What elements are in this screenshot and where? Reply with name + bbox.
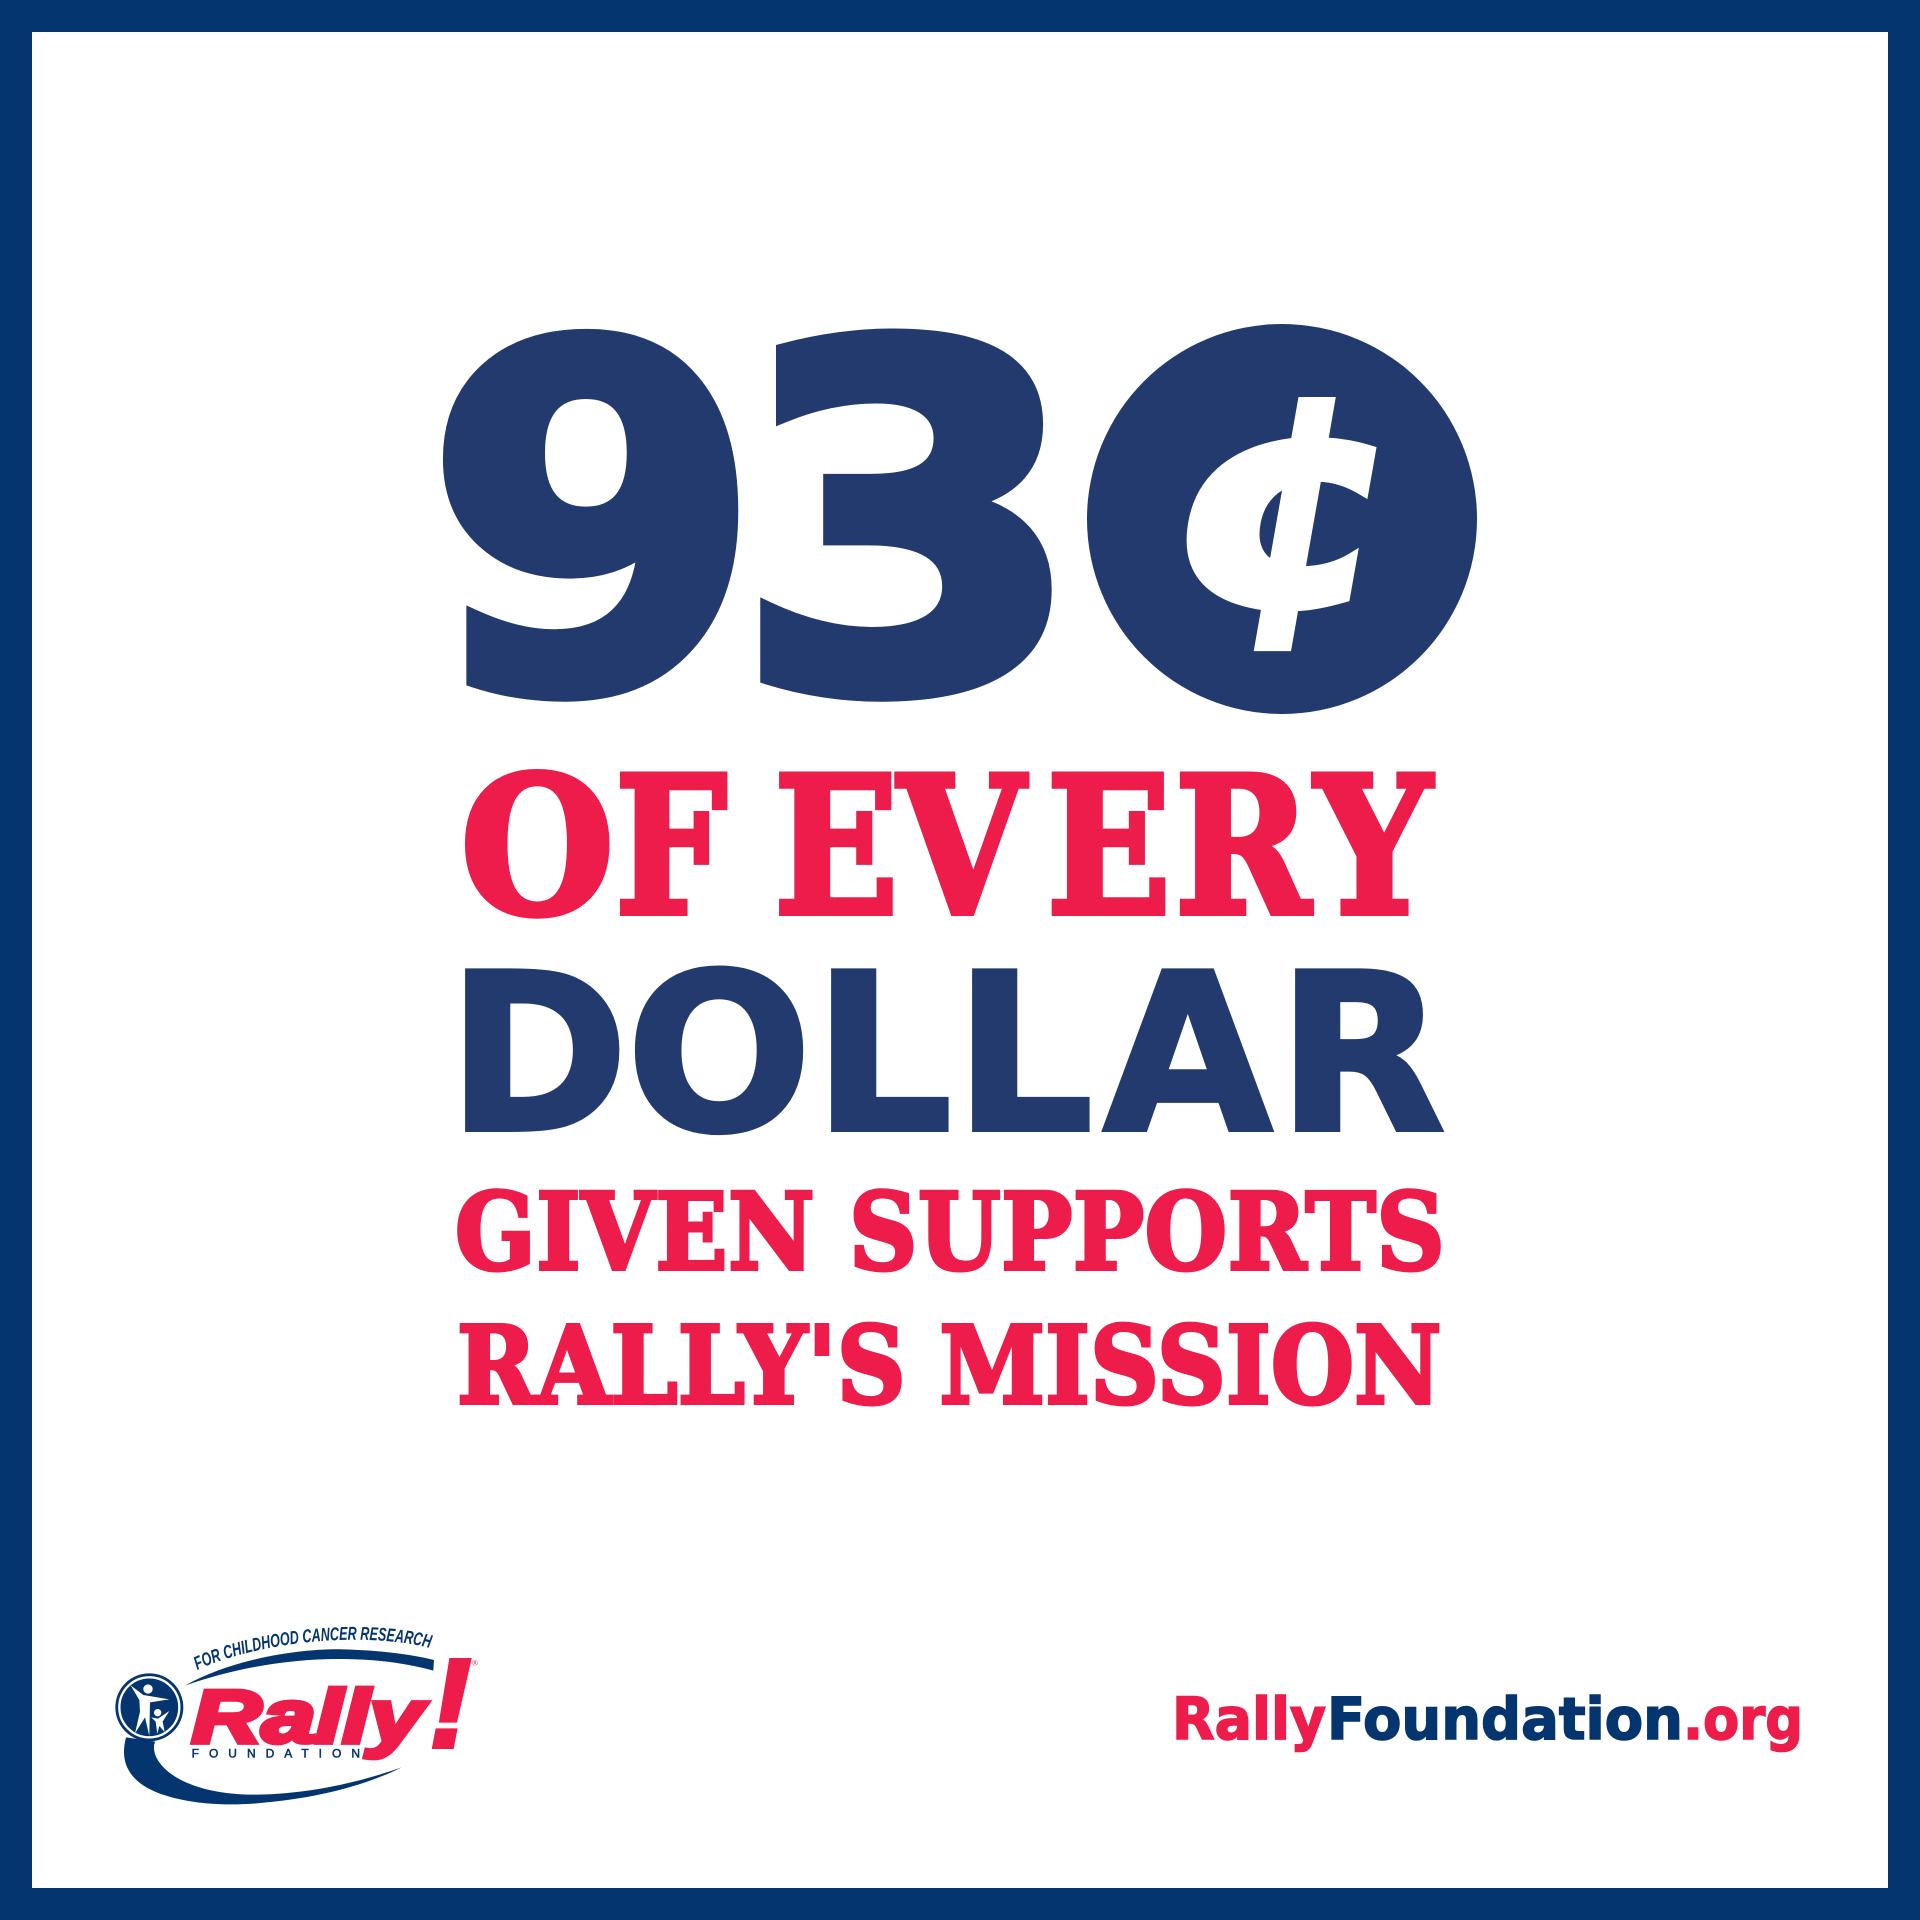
text line: RALLY'S MISSION: RALLY'S MISSION <box>457 1303 1441 1428</box>
website URL: Rally <box>1172 1685 1326 1753</box>
logo emblem: adult and child figures <box>115 1673 183 1741</box>
logo exclamation mark: ! <box>429 1632 471 1774</box>
logo tagline: FOR CHILDHOOD CANCER RESEARCH <box>194 1626 434 1670</box>
text line: OF EVERY: EVERY <box>774 735 1434 958</box>
logo top swoosh <box>185 1649 434 1686</box>
text line: GIVEN SUPPORTS: GIVEN SUPPORTS <box>455 1170 1445 1294</box>
text line: DOLLAR: DOLLAR <box>447 927 1446 1182</box>
cent badge <box>1087 324 1477 714</box>
logo: Rally Foundation <box>115 1626 478 1804</box>
digit 9: 9 <box>425 248 762 801</box>
logo wordmark Rally: Rally <box>192 1675 429 1759</box>
text line: OF EVERY: O <box>460 736 614 959</box>
logo registered mark: ® <box>472 1658 478 1667</box>
website URL <box>1172 1685 1803 1753</box>
digit 3: 3 <box>734 248 1084 801</box>
cent badge: ¢ <box>1138 337 1435 672</box>
website URL: Foundation <box>1327 1685 1683 1753</box>
logo bottom swoosh <box>124 1737 402 1804</box>
text line: OF EVERY: F <box>615 736 727 959</box>
text line: OF EVERY <box>460 735 1434 959</box>
website URL: .org <box>1683 1685 1803 1753</box>
headline number: 93 cents <box>425 248 1477 801</box>
logo FOUNDATION: FOUNDATION <box>192 1746 360 1760</box>
